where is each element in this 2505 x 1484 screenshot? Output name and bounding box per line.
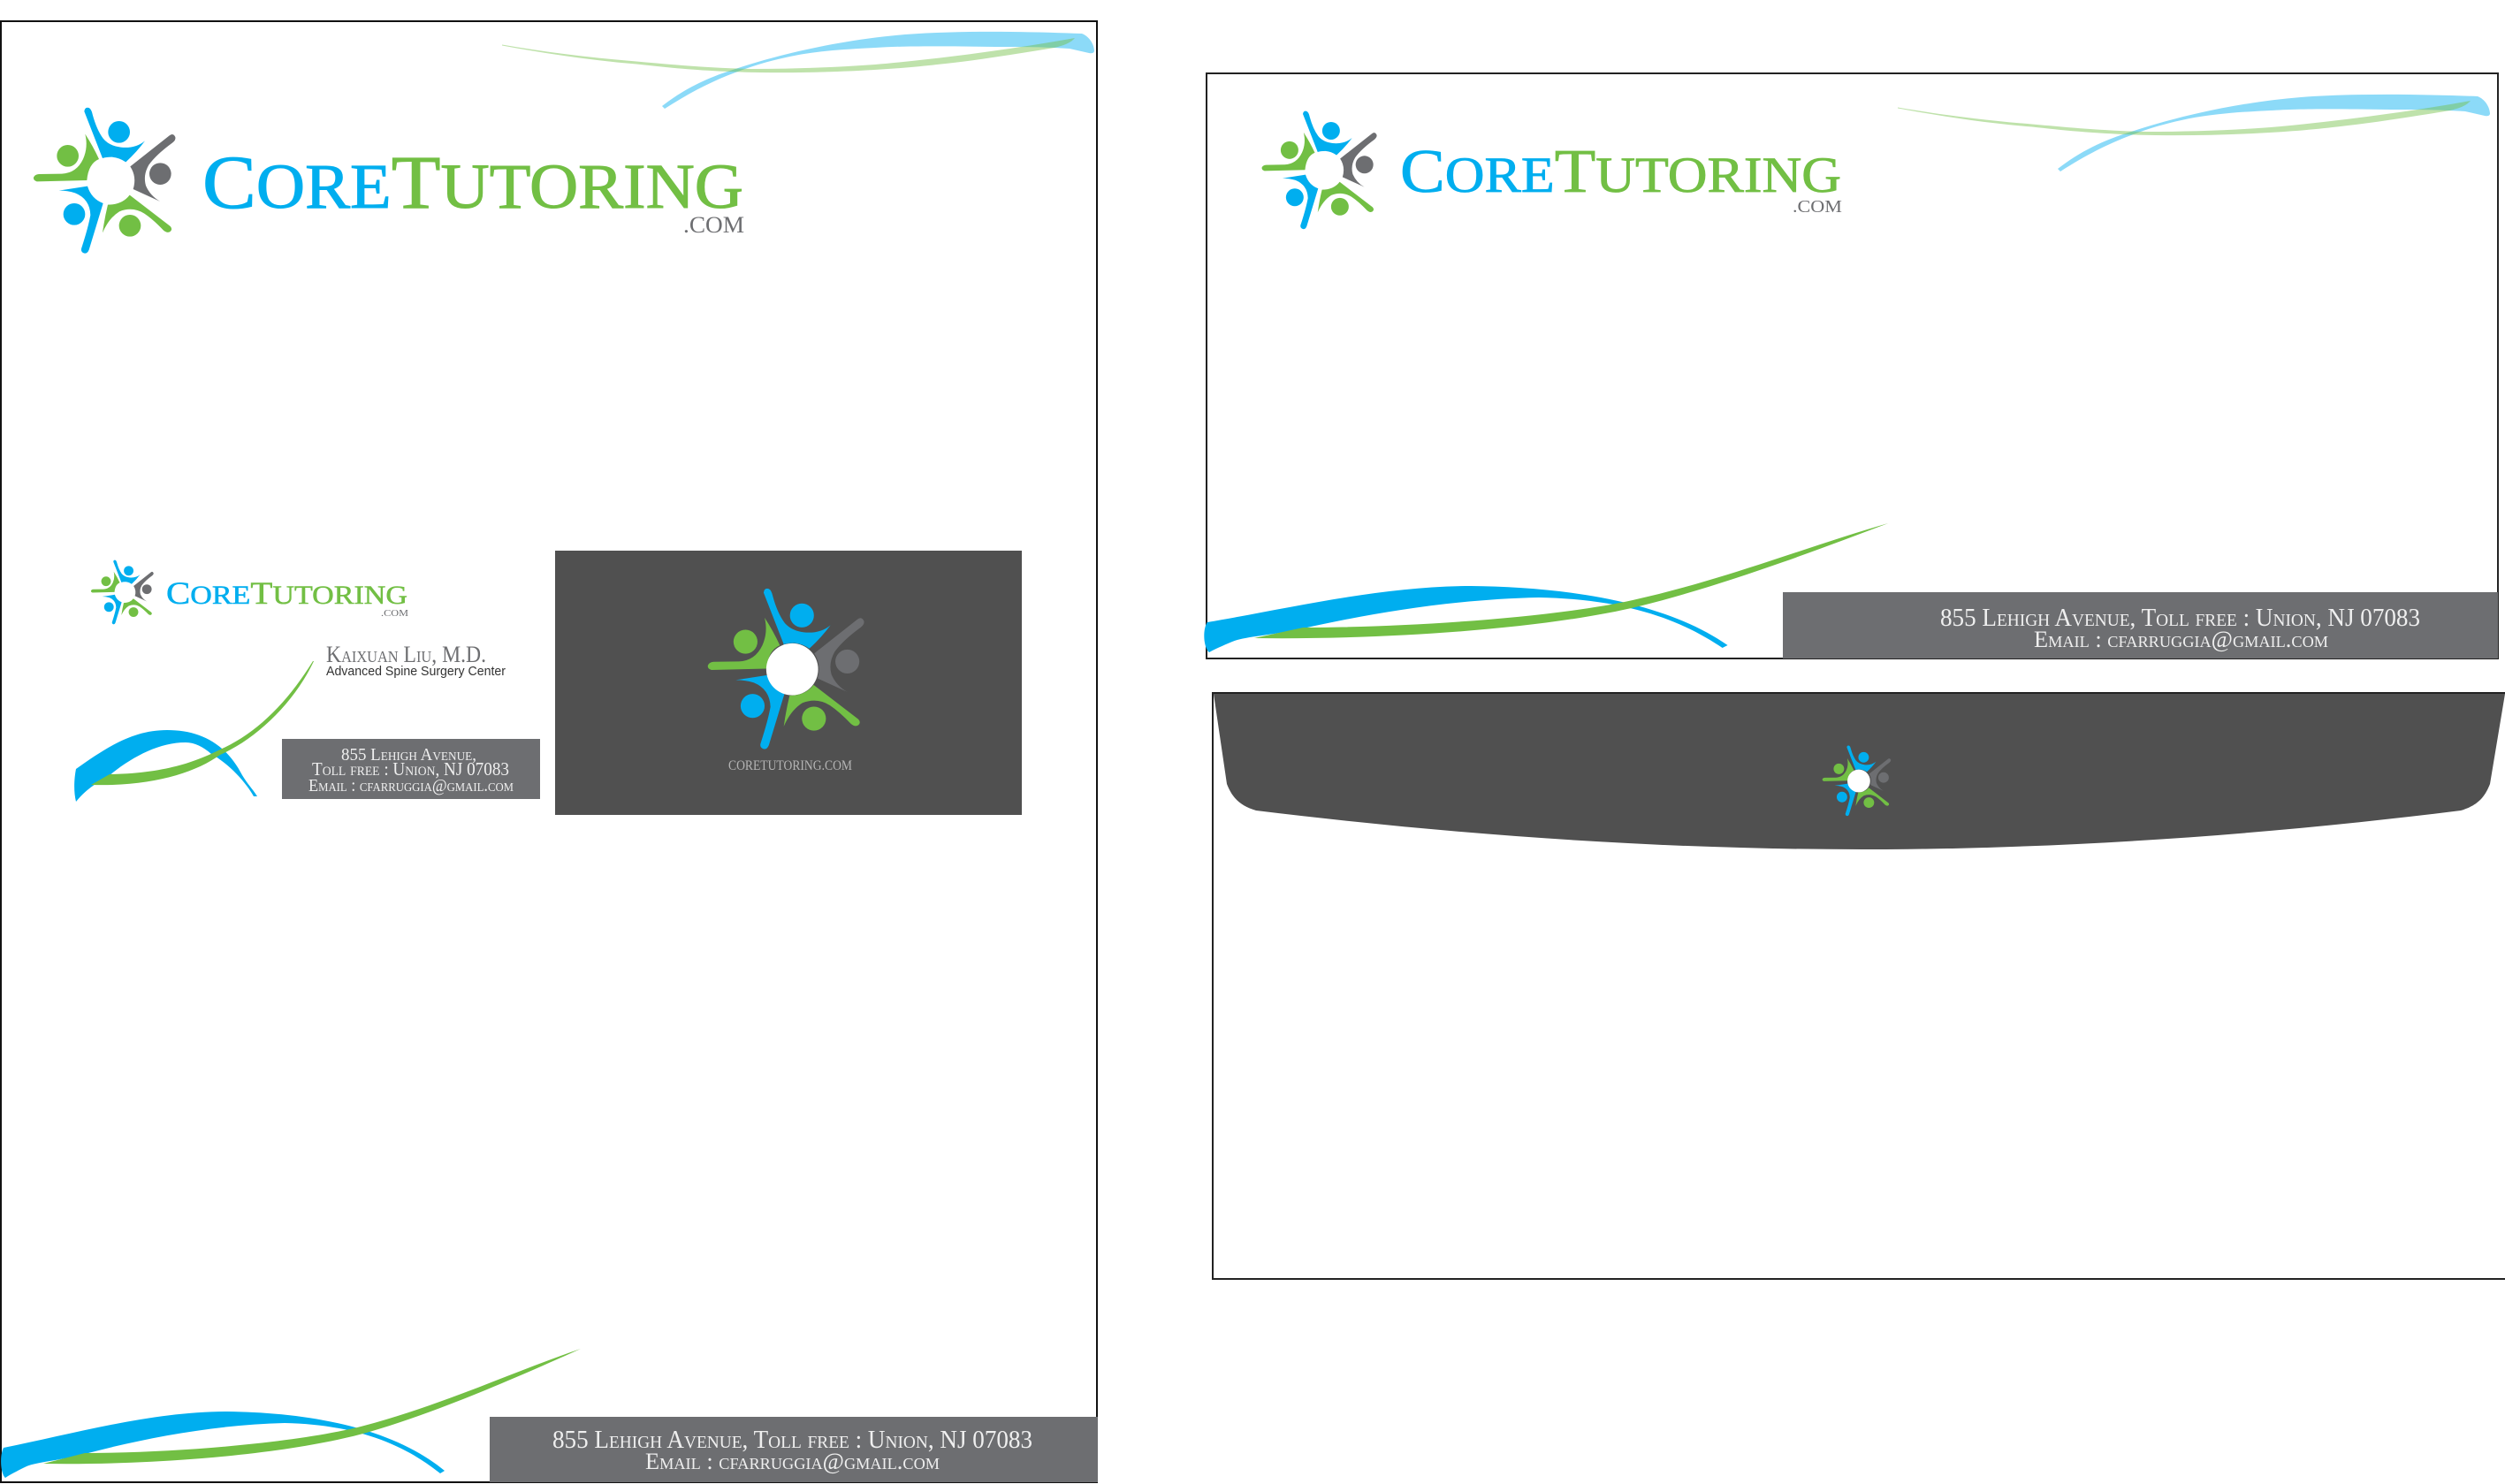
envelope frame [1213, 693, 2505, 1279]
panel: business card front [74, 560, 540, 802]
practice name: Advanced Spine Surgery Center [326, 665, 506, 679]
sheet frame [1207, 73, 2498, 658]
panel: second letterhead sheet [1204, 73, 2498, 658]
name: Kaixuan Liu, M.D. [326, 642, 486, 667]
address line 1: 855 Lehigh Avenue, [341, 745, 476, 765]
logo domain suffix: .COM [683, 212, 744, 238]
footer bar [490, 1417, 1098, 1482]
panel: business card back [555, 551, 1022, 815]
icon: logo mark [1262, 111, 1377, 229]
footer address: 855 Lehigh Avenue, Toll free : Union, NJ 07083 [1940, 605, 2420, 632]
icon: logo mark [34, 108, 176, 254]
email line: Email : cfarruggia@gmail.com [308, 776, 514, 795]
top swoosh [1898, 95, 2490, 171]
card swoosh [74, 661, 314, 802]
envelope flap [1214, 694, 2505, 849]
letterhead frame [1, 21, 1097, 1482]
bottom swoosh [1204, 523, 1888, 652]
wordmark: CORETUTORING [1400, 138, 1841, 206]
footer bar [1783, 592, 2498, 658]
card wordmark: CORETUTORING [166, 575, 407, 611]
footer address: 855 Lehigh Avenue, Toll free : Union, NJ 07083 [552, 1427, 1032, 1454]
icon: logo mark on dark [708, 589, 864, 750]
footer email: Email : cfarruggia@gmail.com [645, 1449, 940, 1474]
card address box [282, 739, 540, 799]
address line 2: Toll free : Union, NJ 07083 [312, 758, 509, 780]
domain suffix: .COM [1793, 197, 1842, 217]
icon: small logo mark [91, 560, 154, 624]
icon: flap logo mark [1823, 745, 1891, 816]
logo wordmark: CORETUTORING [202, 140, 743, 225]
panel: envelope [1213, 693, 2505, 1279]
card domain suffix: .COM [381, 608, 408, 619]
card back domain: CORETUTORING.COM [728, 758, 852, 773]
dark card background [555, 551, 1022, 815]
panel: letterhead [1, 21, 1098, 1482]
top swoosh [502, 32, 1094, 109]
footer email: Email : cfarruggia@gmail.com [2034, 627, 2328, 652]
bottom swoosh [1, 1349, 581, 1478]
